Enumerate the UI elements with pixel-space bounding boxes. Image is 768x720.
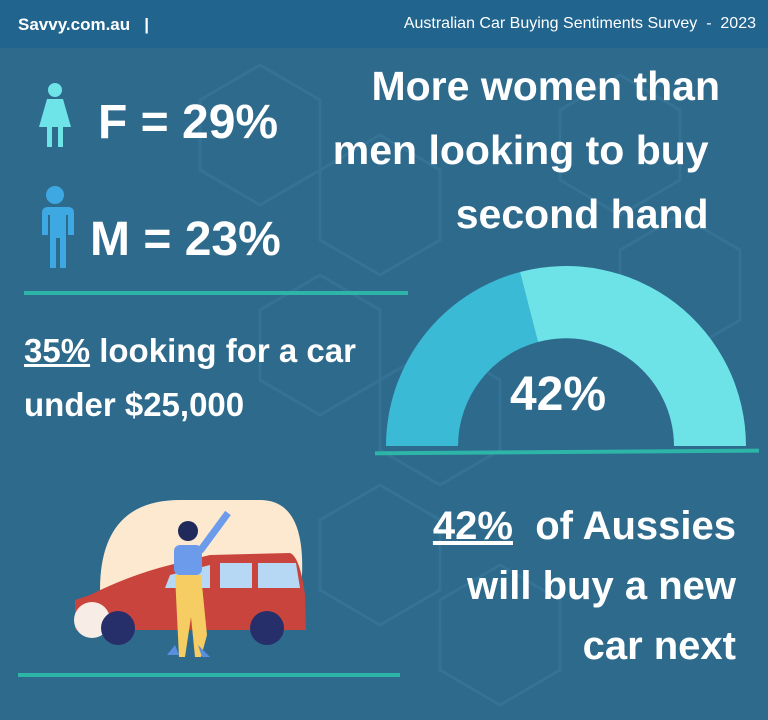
icon: male — [42, 186, 74, 268]
text: 42% new car: car next — [583, 624, 736, 668]
text: 35% under $25,000: under $25,000 — [24, 386, 244, 423]
chart: gauge 42% — [386, 266, 746, 446]
text: 35% under $25,000 — [24, 332, 356, 423]
stat: F = 29%: F = 29% — [98, 96, 278, 149]
header: survey title: Australian Car Buying Sentiments Survey - 2023 — [404, 15, 756, 32]
illustration: woman with car — [74, 500, 306, 657]
divider line right — [375, 449, 759, 455]
header: site name: Savvy.com.au | — [18, 15, 149, 34]
chart: gauge 42%: 42% — [510, 368, 606, 421]
headline: women vs men: second hand — [456, 191, 709, 237]
headline: women vs men — [333, 63, 720, 237]
headline: women vs men: More women than — [371, 63, 720, 109]
text: 42% new car: 42% of Aussies — [433, 504, 736, 548]
headline: women vs men: men looking to buy — [333, 127, 709, 173]
divider line bottom-left — [18, 673, 400, 677]
text: 42% new car: will buy a new — [467, 564, 736, 608]
icon: female — [39, 83, 71, 147]
header bar — [0, 0, 768, 48]
divider line top-left — [24, 291, 408, 295]
text: 42% new car — [432, 504, 736, 668]
stat: M = 23%: M = 23% — [90, 213, 281, 266]
text: 35% under $25,000: 35% looking for a car — [24, 332, 356, 369]
